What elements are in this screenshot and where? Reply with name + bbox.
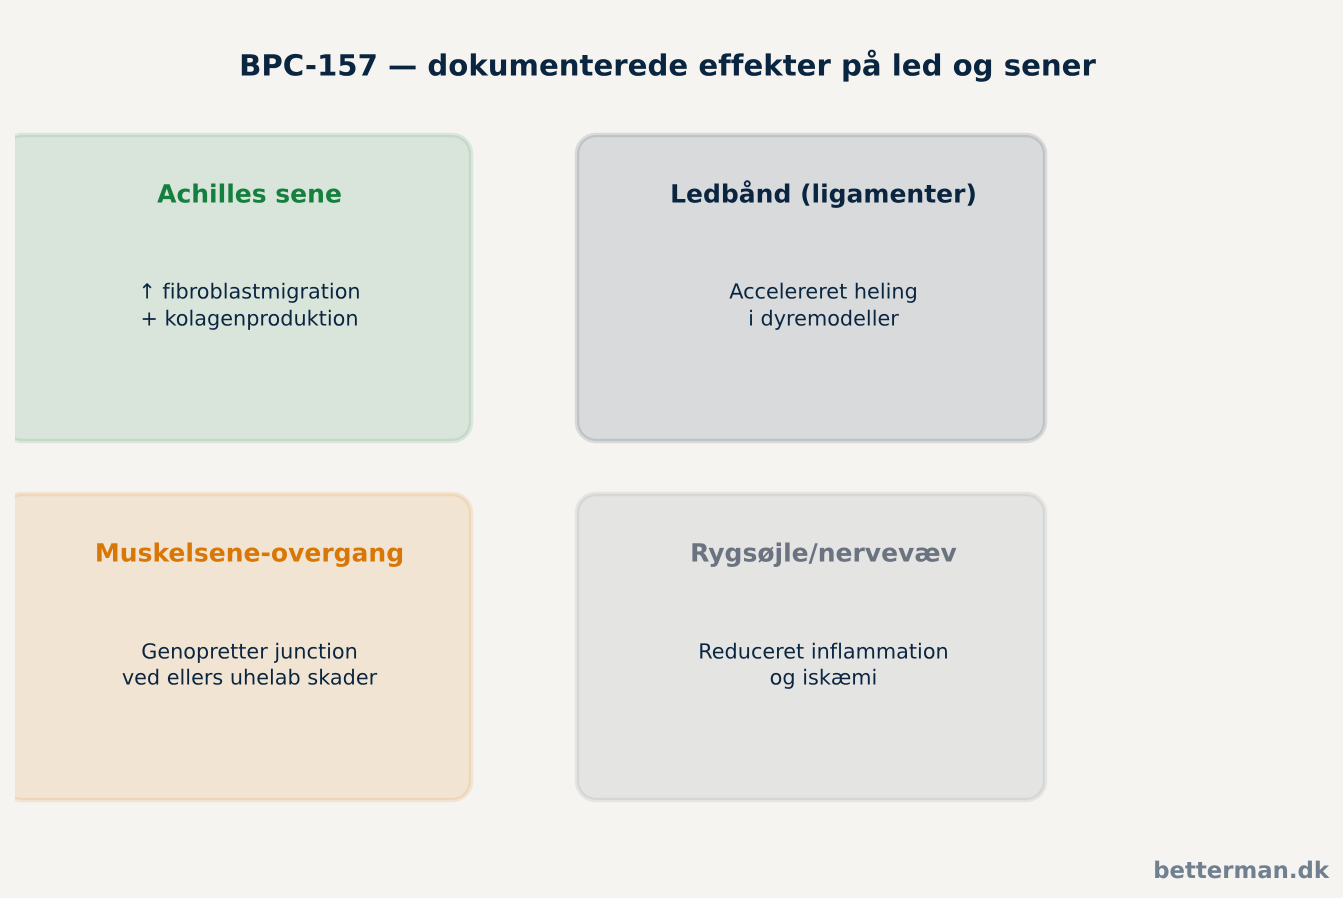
heading: Ledbånd: Ledbånd (ligamenter): [670, 180, 977, 208]
text: Ledbånd effect: [729, 280, 918, 330]
text: Muskelsene-overgang effect: Genopretter junction: [141, 640, 358, 664]
text: Rygsøjle/nervevæv effect: Reduceret inflammation: [698, 640, 949, 664]
text: Rygsøjle/nervevæv effect: [698, 640, 949, 690]
footer brand: betterman.dk: [1153, 858, 1330, 884]
text: Ledbånd effect: i dyremodeller: [748, 306, 899, 330]
card background: Rygsøjle/nervevæv: [577, 494, 1045, 800]
text: Achilles sene effect: + kolagenproduktion: [140, 306, 359, 330]
title: BPC-157 — dokumenterede effekter på led og sener: [239, 48, 1096, 82]
card background: Ledbånd: [577, 135, 1045, 441]
panel: Ledbånd: [577, 135, 1045, 441]
text: Ledbånd effect: Accelereret heling: [729, 280, 918, 304]
panel: Rygsøjle/nervevæv: [577, 494, 1045, 800]
text: Achilles sene effect: ↑ fibroblastmigration: [138, 280, 361, 304]
panel: Achilles sene: [3, 135, 471, 441]
heading: Rygsøjle/nervevæv: Rygsøjle/nervevæv: [690, 538, 957, 568]
card background: Achilles sene: [3, 135, 471, 441]
text: Rygsøjle/nervevæv effect: og iskæmi: [770, 666, 877, 690]
text: Muskelsene-overgang effect: [122, 640, 378, 690]
panel: Muskelsene-overgang: [3, 494, 471, 800]
card background: Muskelsene-overgang: [3, 494, 471, 800]
text: Muskelsene-overgang effect: ved ellers uhelab skader: [122, 666, 378, 690]
heading: Achilles sene: Achilles sene: [157, 180, 342, 208]
text: Achilles sene effect: [138, 280, 361, 330]
heading: Muskelsene-overgang: Muskelsene-overgang: [95, 538, 404, 568]
